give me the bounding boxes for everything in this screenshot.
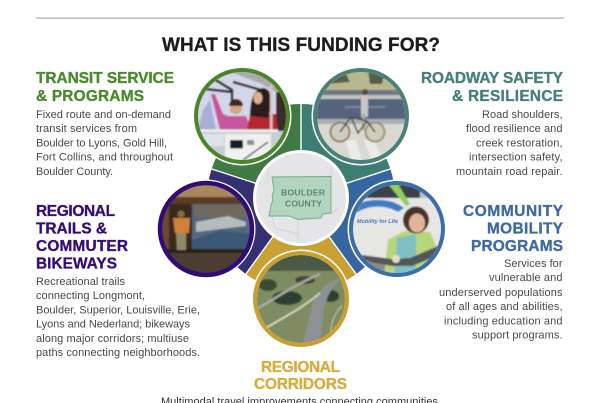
body: Fixed route and on-demand <box>36 109 171 121</box>
photo circle: woman at Mobility for Life bus <box>348 180 446 278</box>
centre circle: Boulder County map: COUNTY <box>285 198 322 208</box>
body: including education and <box>444 316 562 328</box>
heading <box>36 70 174 105</box>
heading: REGIONAL <box>36 203 115 220</box>
photo circle: cyclist passing a mural <box>156 180 256 278</box>
body: connecting Longmont, <box>36 290 145 302</box>
body: creek restoration, <box>476 138 562 150</box>
body: mountain road repair. <box>456 166 562 178</box>
photo circle: bicycle at a crosswalk <box>312 66 410 166</box>
body: Services for <box>504 258 563 270</box>
body: transit services from <box>36 123 137 135</box>
centre circle: Boulder County map <box>253 150 349 246</box>
photo circle: riders on a bus <box>192 66 292 166</box>
body: Lyons and Nederland; bikeways <box>36 318 190 330</box>
body <box>36 109 173 178</box>
text block: community mobility <box>439 203 564 342</box>
segment: trails <box>207 169 301 274</box>
title: WHAT IS THIS FUNDING FOR? <box>162 35 440 56</box>
body: Boulder, Superior, Louisville, Erie, <box>36 304 200 316</box>
heading: COMMUTER <box>36 238 128 255</box>
heading <box>36 203 128 272</box>
heading <box>421 70 564 105</box>
heading: CORRIDORS <box>254 376 347 393</box>
body <box>36 276 200 359</box>
ring <box>160 183 252 275</box>
body: Boulder to Lyons, Gold Hill, <box>36 138 167 150</box>
photo circle: woman at Mobility for Life bus: Mobility for Life <box>357 219 398 225</box>
heading: & RESILIENCE <box>452 88 563 105</box>
body: along major corridors; multiuse <box>36 333 189 345</box>
heading: PROGRAMS <box>471 238 563 255</box>
heading: & PROGRAMS <box>36 88 144 105</box>
heading <box>254 359 347 393</box>
map: county shape <box>269 176 331 220</box>
segment: community mobility <box>301 169 395 274</box>
heading: TRANSIT SERVICE <box>36 70 174 87</box>
body: Recreational trails <box>36 276 126 288</box>
body <box>456 109 562 178</box>
ring <box>315 70 407 162</box>
text block: roadway safety <box>421 70 564 178</box>
photo circle: aerial view of a regional corridor <box>252 250 350 348</box>
body: of all ages and abilities, <box>446 301 562 313</box>
map label: BOULDER <box>281 188 326 198</box>
body: flood resilience and <box>466 123 562 135</box>
heading <box>463 203 564 255</box>
body: vulnerable and <box>489 272 562 284</box>
body <box>439 258 563 342</box>
body: underserved populations <box>439 287 563 299</box>
body: intersection safety, <box>469 152 562 164</box>
body: support programs. <box>472 330 562 342</box>
body: Fort Collins, and throughout <box>36 152 173 164</box>
ring <box>351 183 443 275</box>
heading: TRAILS & <box>36 220 107 238</box>
body: Road shoulders, <box>482 109 562 121</box>
text block: transit service <box>36 70 174 178</box>
body: Boulder County. <box>36 166 113 178</box>
segment: roadway <box>301 104 390 198</box>
segment: transit <box>212 104 301 198</box>
body: paths connecting neighborhoods. <box>36 347 200 359</box>
ring <box>255 253 347 345</box>
ring <box>196 70 288 162</box>
heading: COMMUNITY <box>463 203 564 220</box>
heading: BIKEWAYS <box>36 256 117 272</box>
text block: regional trails <box>36 203 200 359</box>
heading: MOBILITY <box>487 220 564 238</box>
text block: regional corridors <box>161 359 438 403</box>
heading: REGIONAL <box>261 359 340 376</box>
segment: regional corridors <box>246 198 356 292</box>
heading: ROADWAY SAFETY <box>421 70 564 87</box>
pentagon ring of coloured segments <box>207 100 395 292</box>
